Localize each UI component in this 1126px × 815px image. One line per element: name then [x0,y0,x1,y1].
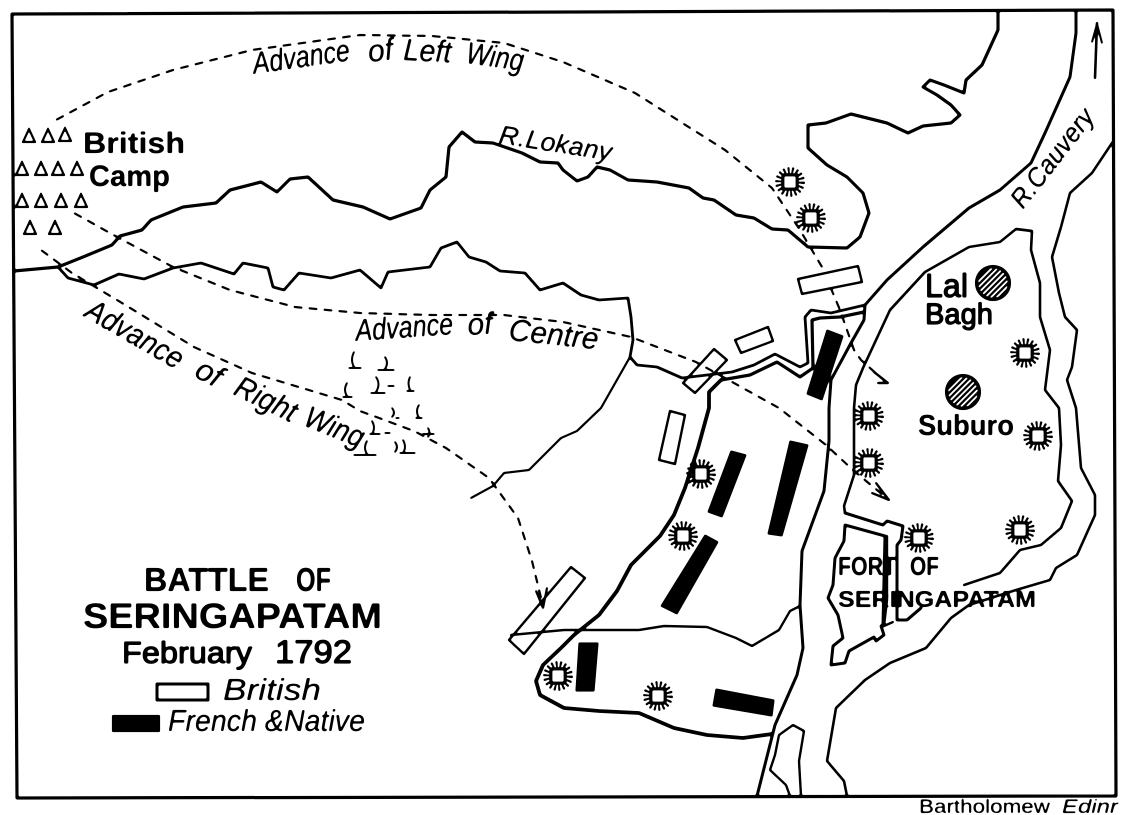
river: R. Lokany upper course [14,11,998,271]
river: branch toward the south west [471,357,630,498]
river Cauvery: south bank [827,143,1112,796]
label: Advance of Left Wing: of [366,31,398,69]
label: Advance of Centre: Advance [352,306,454,348]
title [83,561,382,670]
river: thick inner channel [721,312,864,380]
label: Advance of Right Wing: Advance [78,291,191,376]
small river island [770,725,804,796]
label: Advance of Right Wing: Right [229,369,305,430]
suburb island outline [844,229,1072,585]
label: British Camp [83,127,185,193]
island cross stream [511,606,800,646]
label: Advance of Right Wing: Wing [299,399,370,455]
label: British Camp: Camp [89,160,170,193]
label: R. Cauvery: R.Cauvery [1004,101,1101,214]
legend: British swatch [157,684,208,700]
label: Advance of Left Wing: Left [403,32,454,70]
credit [919,797,1119,815]
Fort of Seringapatam outline [828,513,921,665]
French and Native positions [576,330,843,716]
legend: French and Native label: French &Native [168,703,365,738]
label: Advance of Right Wing: of [190,351,232,396]
title: February [122,635,253,670]
label: Advance of Left Wing: Wing [464,35,526,78]
label: Lal Bagh [925,267,993,331]
label: British Camp: British [83,127,185,160]
label: Fort of Seringapatam: SERINGAPATAM [838,586,1036,612]
label: Fort of Seringapatam: OF [910,551,939,581]
British camp tents [16,128,87,234]
island boundary: thick outline [536,380,772,738]
label: Advance of Centre: Centre [507,312,600,356]
trees / marsh marks [343,352,434,455]
redoubts [547,171,1049,707]
British positions [509,266,862,654]
title: OF [296,561,331,598]
dashed route: advance of left wing [56,35,888,383]
label: Suburo: Suburo [918,410,1014,442]
label: Lal Bagh: Lal [925,267,968,304]
label: R. Lokany: R.Lokany [497,119,616,167]
Lal Bagh garden [976,266,1010,300]
Suburo garden [946,376,980,408]
label: Fort of Seringapatam: FORT [838,551,896,581]
label: Fort of Seringapatam [838,551,1036,612]
dashed route: advance of right wing [41,250,547,608]
dashed route: advance of centre [74,213,889,500]
label: Advance of Centre [352,306,600,356]
legend: British label: British [223,672,321,707]
title: SERINGAPATAM [83,597,382,636]
arrow: river flow direction [1092,23,1102,78]
legend: French and Native swatch [112,715,160,732]
title: 1792 [275,634,352,670]
label: Advance of Centre: of [467,306,497,342]
title: BATTLE [144,561,269,598]
label: Lal Bagh: Bagh [925,298,993,331]
label: Advance of Right Wing [78,291,370,455]
label: Advance of Left Wing: Advance [248,33,352,81]
river: lower tributary [58,242,865,378]
river Cauvery: north bank [757,11,1076,796]
label: Advance of Left Wing [248,31,526,81]
legend [112,672,365,738]
